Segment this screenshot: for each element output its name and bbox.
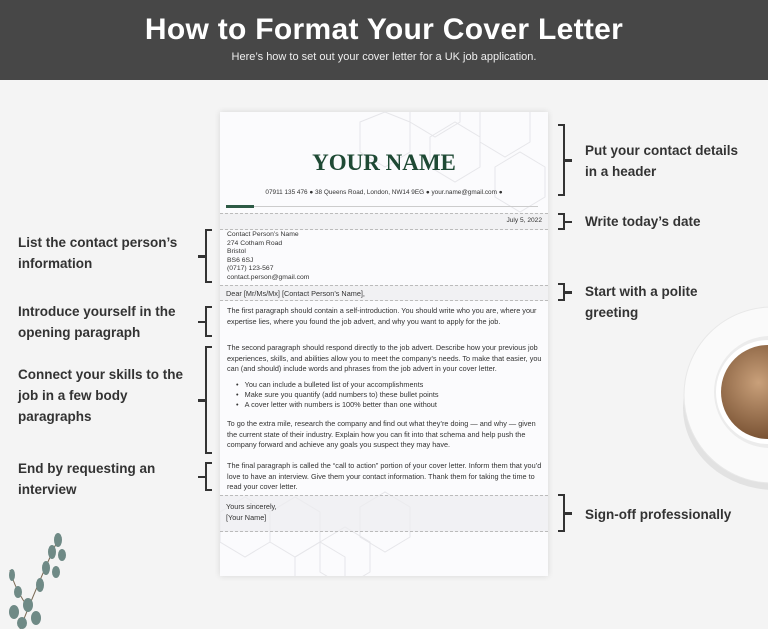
contact line: 07911 135 476 ● 38 Queens Road, London, NW14 9EG ● your.name@gmail.com ● bbox=[265, 189, 503, 196]
left annotations bbox=[18, 229, 212, 497]
label: interview bbox=[18, 461, 155, 497]
recipient address: contact.person@gmail.com bbox=[227, 274, 309, 281]
date band bbox=[220, 213, 548, 230]
extra paragraph: To go the extra mile, research the company and find out what they’re doing — and why — given the current state of their industry. Explain how you can fit into that schema and help push the company forward and achieve any goals you suspect they may have. bbox=[227, 419, 536, 449]
recipient address: 274 Cotham Road bbox=[227, 240, 282, 247]
bullets bbox=[236, 380, 439, 409]
label: contact person: List the contact person’s bbox=[18, 235, 177, 250]
recipient address bbox=[227, 231, 309, 281]
recipient address: Contact Person’s Name bbox=[227, 231, 299, 238]
bracket: greeting bbox=[558, 283, 565, 301]
label: skills: job in a few body bbox=[18, 388, 128, 403]
icon: coffee cup bbox=[683, 306, 768, 490]
hexagon pattern bbox=[220, 112, 546, 576]
label: interview: End by requesting an bbox=[18, 461, 155, 476]
bullets: • You can include a bulleted list of your accomplishments bbox=[236, 380, 423, 389]
label: introduce: opening paragraph bbox=[18, 325, 140, 340]
label: header: in a header bbox=[585, 164, 656, 179]
bracket: header bbox=[558, 124, 565, 196]
label: skills: paragraphs bbox=[18, 409, 92, 424]
bracket: introduce bbox=[205, 306, 212, 337]
label: skills bbox=[18, 367, 183, 424]
label: skills: Connect your skills to the bbox=[18, 367, 183, 382]
label: sign-off: Sign-off professionally bbox=[585, 507, 731, 522]
label: greeting bbox=[585, 284, 698, 320]
bracket: skills bbox=[205, 346, 212, 454]
sign-off band: Yours sincerely, bbox=[226, 502, 277, 511]
label: header bbox=[585, 143, 738, 179]
bracket: interview bbox=[205, 462, 212, 491]
letter paper bbox=[220, 112, 548, 576]
label: introduce: Introduce yourself in the bbox=[18, 304, 176, 319]
label: greeting: Start with a polite bbox=[585, 284, 698, 299]
greeting band: Dear [Mr/Ms/Mx] [Contact Person’s Name], bbox=[226, 289, 365, 298]
header banner bbox=[0, 0, 768, 80]
label: contact person bbox=[18, 235, 177, 271]
final paragraph: The final paragraph is called the “call to action” portion of your cover letter. Inform them that you’d love to have an interview. Give them your contact information. Thank them for taking the time to read your cover letter. bbox=[227, 461, 541, 491]
sign-off band bbox=[220, 495, 548, 532]
bracket: contact person bbox=[205, 229, 212, 283]
label: introduce bbox=[18, 304, 176, 340]
right annotations bbox=[558, 124, 738, 532]
date band: July 5, 2022 bbox=[506, 217, 542, 224]
recipient address: BS6 6SJ bbox=[227, 257, 253, 264]
label: contact person: information bbox=[18, 256, 92, 271]
label: greeting: greeting bbox=[585, 305, 638, 320]
icon: plant bbox=[9, 533, 66, 629]
label: date: Write today’s date bbox=[585, 214, 701, 229]
label: header: Put your contact details bbox=[585, 143, 738, 158]
label: interview: interview bbox=[18, 482, 77, 497]
greeting band bbox=[220, 285, 548, 301]
bullets: • A cover letter with numbers is 100% better than one without bbox=[236, 400, 437, 409]
name: YOUR NAME bbox=[312, 150, 456, 175]
recipient address: (0717) 123-567 bbox=[227, 265, 273, 272]
bracket: sign-off bbox=[558, 494, 565, 532]
body paragraph: The second paragraph should respond directly to the job advert. Describe how your previous job experiences, skills, and abilities allow you to meet the company’s needs. To make that easier, you can (and should) include words and phrases from the job advert in your cover letter. bbox=[227, 343, 541, 373]
bracket: date bbox=[558, 213, 565, 230]
title: How to Format Your Cover Letter bbox=[145, 13, 623, 46]
bullets: • Make sure you quantify (add numbers to) these bullet points bbox=[236, 390, 439, 399]
subtitle: Here’s how to set out your cover letter for a UK job application. bbox=[232, 51, 536, 63]
sign-off band: [Your Name] bbox=[226, 512, 266, 522]
recipient address: Bristol bbox=[227, 248, 246, 255]
opening paragraph: The first paragraph should contain a self-introduction. You should write who you are, where your expertise lies, where you found the job advert, and why you want to apply for the job. bbox=[227, 306, 536, 326]
